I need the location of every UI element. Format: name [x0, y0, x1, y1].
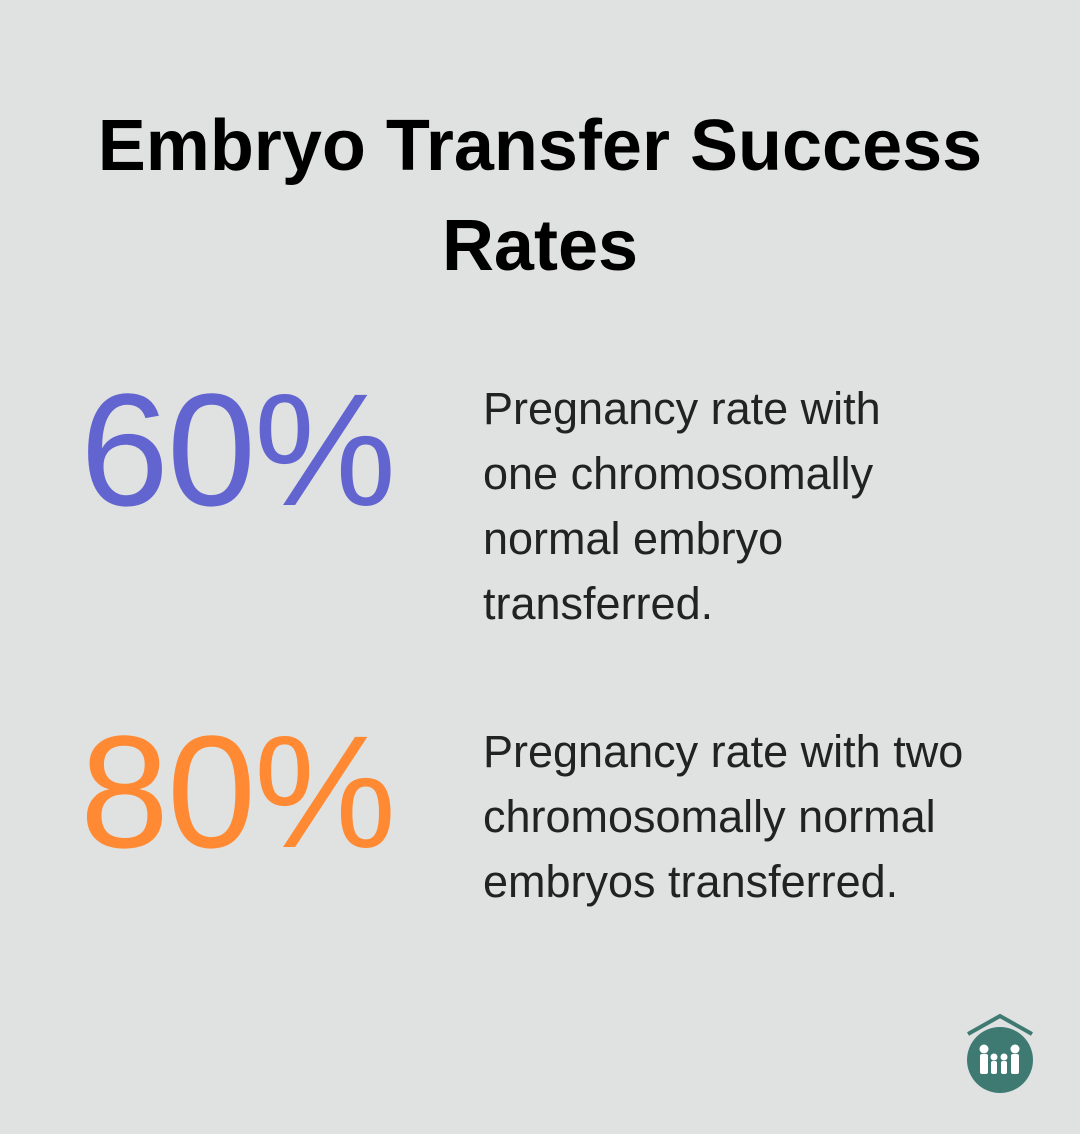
text: 60% description: one chromosomally	[483, 448, 873, 499]
text: 80% description	[483, 726, 963, 907]
text: 60% description	[483, 383, 881, 629]
text: 60% description: normal embryo	[483, 513, 783, 564]
text: 60% description: Pregnancy rate with	[483, 383, 881, 434]
text: 80% description: Pregnancy rate with two	[483, 726, 963, 777]
title: Rates	[442, 206, 638, 286]
stat: 60%: 60%	[80, 360, 394, 539]
title: Embryo Transfer Success	[98, 106, 982, 186]
icon: logo	[967, 1014, 1033, 1093]
stat: 80%: 80%	[80, 702, 394, 881]
text: 60% description: transferred.	[483, 578, 713, 629]
text: 80% description: embryos transferred.	[483, 856, 898, 907]
title	[98, 106, 982, 286]
text: 80% description: chromosomally normal	[483, 791, 936, 842]
